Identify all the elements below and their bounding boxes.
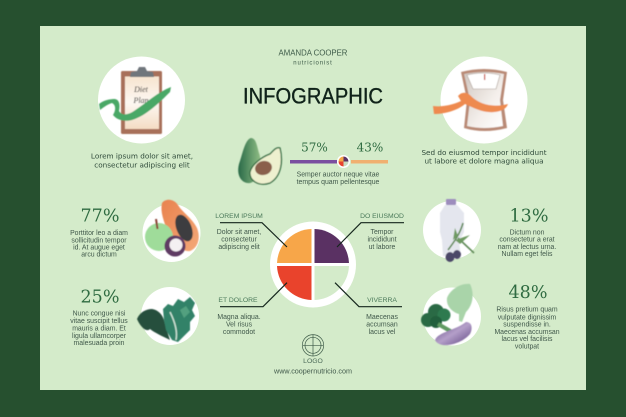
description: mauris a diam. Et	[72, 326, 126, 333]
description: Nunc congue nisi	[73, 311, 126, 318]
stat: 48%	[509, 283, 547, 303]
panel: 25% lettuce	[70, 287, 199, 347]
panel: scale	[421, 56, 547, 166]
logo	[302, 335, 324, 365]
caption	[421, 148, 547, 166]
callout: et dolore: ET DOLORE	[218, 297, 258, 304]
callout: do eiusmod: ut labore	[369, 244, 396, 251]
callout: et dolore: Vel risus	[226, 321, 253, 328]
callout: lorem ipsum: Dolor sit amet,	[217, 229, 261, 236]
callout: viverra: VIVERRA	[367, 297, 397, 304]
description: Risus pretium quam	[496, 307, 558, 314]
callout: do eiusmod	[337, 213, 404, 251]
stat: 25%	[81, 287, 119, 307]
callout: viverra: accumsan	[366, 321, 398, 328]
description: consectetur a erat	[499, 237, 555, 244]
description: Nullam eget felis	[502, 251, 553, 258]
website: www.coopernutricio.com	[273, 366, 352, 376]
caption	[297, 172, 380, 186]
callout: lorem ipsum: LOREM IPSUM	[215, 213, 263, 220]
icon: clipboard: Diet	[133, 85, 149, 94]
panel: avocado comparison	[238, 138, 388, 186]
callout: et dolore: commodot	[223, 329, 255, 336]
callout: lorem ipsum	[215, 213, 287, 251]
description	[498, 229, 556, 258]
icon: leafy greens	[137, 297, 195, 342]
panel: 48% vegetables	[421, 283, 560, 350]
header: author name: AMANDA COOPER	[279, 48, 348, 57]
description: id. At augue eget	[73, 244, 125, 252]
icon: fruit	[145, 200, 199, 256]
description: lacus vel facilisis	[502, 336, 553, 343]
description: suspendisse in.	[503, 322, 551, 329]
callout: viverra	[335, 283, 402, 336]
callout: viverra: Maecenas	[366, 314, 398, 321]
percent values	[301, 141, 383, 155]
stat: 77%	[81, 207, 119, 227]
slider bar	[290, 155, 388, 168]
callout: et dolore	[217, 283, 287, 336]
description: arcu dictum	[81, 252, 117, 259]
caption	[91, 152, 193, 169]
callout: do eiusmod: Tempor	[371, 229, 394, 236]
caption: tempus quam pellentesque	[297, 179, 380, 186]
panel: 13% bottle	[423, 199, 556, 262]
callout: do eiusmod: DO EIUSMOD	[360, 213, 404, 220]
description: sollicitudin tempor	[71, 237, 127, 244]
panel: 77% fruit	[70, 200, 200, 262]
description: nam at lectus urna.	[498, 244, 556, 251]
callout: lorem ipsum: consectetur	[221, 236, 258, 243]
percent values: 43%	[357, 141, 383, 155]
logo: LOGO	[303, 358, 323, 365]
panel: background	[40, 26, 586, 390]
chart: pie plate	[270, 222, 356, 308]
icon: vegetables	[421, 284, 473, 345]
description: volutpat	[515, 343, 539, 350]
icon: clipboard: Plan	[132, 96, 149, 105]
panel: diet plan	[91, 56, 193, 169]
caption: Lorem ipsum dolor sit amet,	[91, 152, 193, 161]
header: author name	[279, 48, 348, 66]
header: author name: nutricionist	[293, 60, 333, 66]
icon: oil bottle and olives	[440, 199, 474, 262]
description: Porttitor leo a diam	[70, 230, 128, 237]
description: vitae suscipit tellus	[70, 318, 128, 325]
description	[494, 307, 560, 350]
description: Dictum non	[510, 229, 545, 236]
icon: bathroom scale	[433, 69, 508, 131]
callout: do eiusmod: incididunt	[367, 236, 397, 243]
icon: avocado	[238, 138, 281, 184]
description: Maecenas accumsan	[494, 329, 560, 336]
description: ligula ullamcorper	[72, 333, 127, 340]
icon: clipboard	[99, 67, 171, 134]
caption: Sed do eiusmod tempor incididunt	[421, 148, 547, 157]
description	[70, 230, 128, 259]
stat: 13%	[510, 207, 548, 227]
title: INFOGRAPHIC	[243, 83, 383, 108]
description	[70, 311, 128, 347]
caption: ut labore et dolore magna aliqua	[424, 157, 544, 166]
description: vulputate dignissim	[498, 314, 557, 321]
caption: consectetur adipiscing elit	[94, 160, 190, 169]
caption: Semper auctor neque vitae	[297, 172, 380, 179]
callout: et dolore: Magna aliqua.	[217, 314, 261, 321]
callout: lorem ipsum: adipiscing elit	[218, 244, 260, 251]
percent values: 57%	[301, 141, 328, 155]
callout: viverra: lacus vel	[369, 329, 396, 336]
description: malesuada proin	[74, 340, 125, 347]
